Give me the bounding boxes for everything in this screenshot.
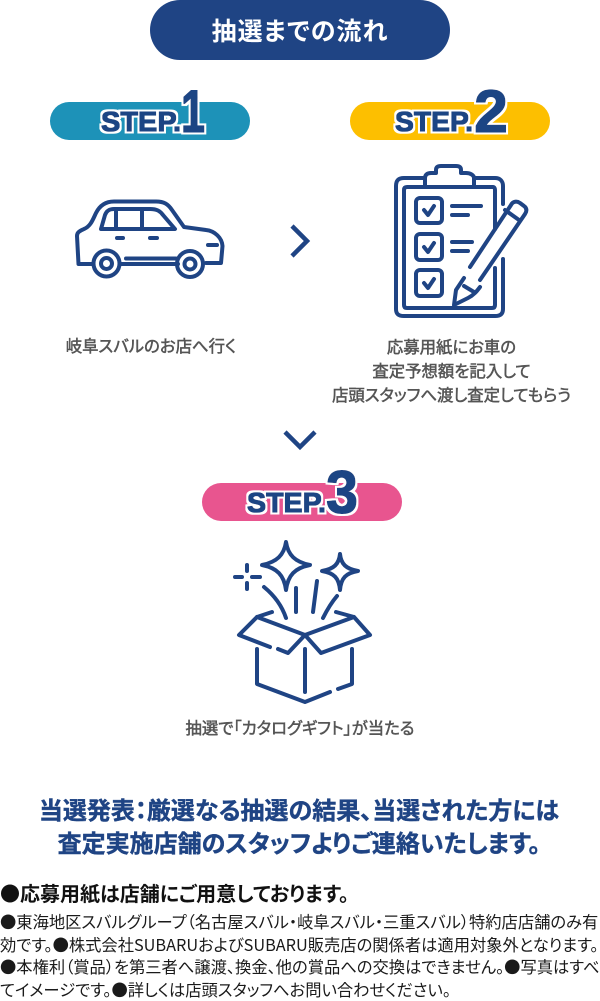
caption: step 2: 応募用紙にお車の [387,334,516,358]
title pill [150,0,450,60]
step 3 badge [202,465,402,525]
note body: ●本権利（賞品）を第三者へ譲渡、換金、他の賞品への交換はできません。●写真はすべ [0,954,600,978]
note body [0,909,600,1001]
note body: てイメージです。●詳しくは店頭スタッフへお問い合わせください。 [0,977,451,1001]
notes block [0,878,600,1001]
step 1 badge [50,84,250,144]
caption: step 2: 店頭スタッフへ渡し査定してもらう [332,382,571,406]
caption: step 2: 査定予想額を記入して [372,358,531,382]
caption: step 2 [332,334,571,406]
note body: ●東海地区スバルグループ（名古屋スバル・岐阜スバル・三重スバル）特約店店舗のみ有 [0,909,598,933]
announcement text [39,791,559,859]
step 1 badge: STEP. [101,106,181,137]
announcement text: 査定実施店舗のスタッフよりご連絡いたします。 [58,824,540,859]
icon: car [75,200,224,279]
step 2 badge [350,84,550,144]
step 3 badge: STEP. [247,487,326,518]
note body: 効です。●株式会社SUBARUおよびSUBARU販売店の関係者は適用対象外となります。 [0,932,598,956]
title pill: 抽選までの流れ [212,12,388,48]
note heading: ●応募用紙は店舗にご用意しております。 [0,878,349,907]
caption: step 3: 抽選で「カタログギフト」が当たる [185,715,414,739]
arrow: down chevron [284,430,316,450]
announcement text: 当選発表：厳選なる抽選の結果、当選された方には [39,791,559,826]
caption: step 1: 岐阜スバルのお店へ行く [66,333,236,357]
icon: clipboard and pencil [394,164,528,318]
arrow: right chevron [290,224,310,258]
step 2 badge: STEP. [395,106,473,137]
icon: gift box with sparkles [233,540,372,704]
